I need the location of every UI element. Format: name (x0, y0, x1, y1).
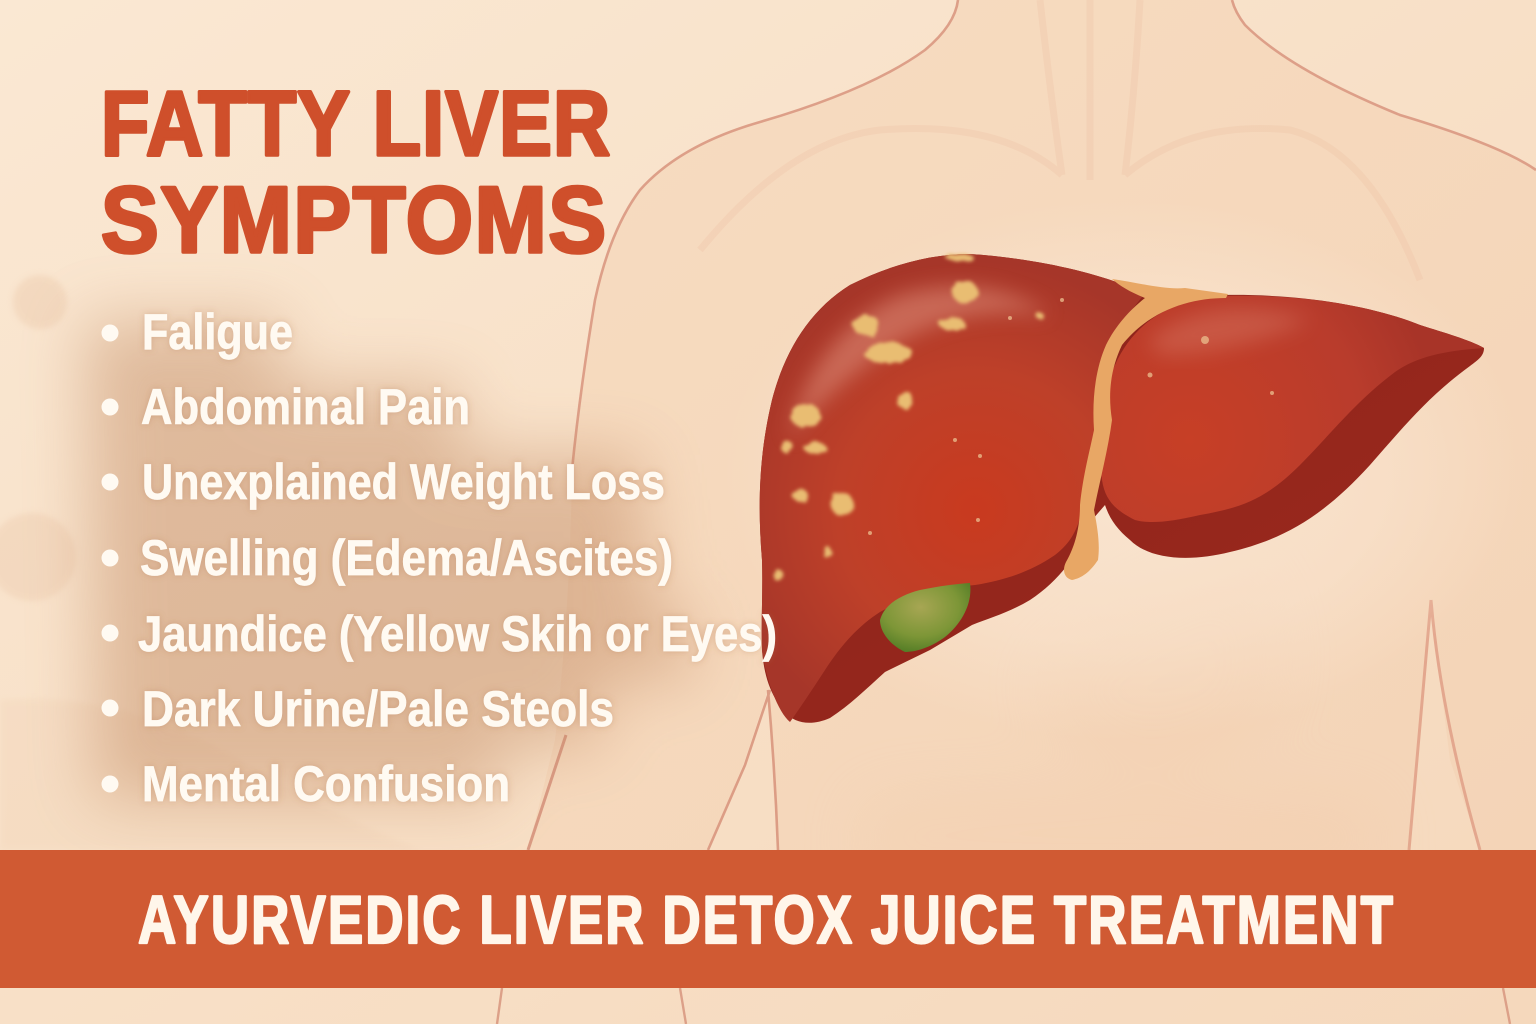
liver: dark underside (760, 254, 1484, 723)
symptoms list (102, 304, 777, 812)
liver: left lobe surface (760, 254, 1142, 722)
title: FATTY LIVER (101, 72, 610, 175)
liver: ligament (1064, 279, 1228, 580)
faint anatomy: organ shapes (860, 560, 1380, 880)
liver illustration (760, 254, 1484, 723)
symptom items (138, 304, 777, 812)
fat deposits (773, 254, 1044, 581)
liver: right lobe surface (1099, 296, 1484, 522)
bullets (102, 324, 118, 792)
title: SYMPTOMS (101, 168, 606, 273)
gallbladder (880, 583, 970, 652)
symptom items: Unexplained Weight Loss (142, 454, 665, 510)
small specks (868, 298, 1274, 535)
symptom items: Mental Confusion (142, 756, 510, 812)
liver: right lobe highlight (1150, 308, 1310, 355)
symptom items: Jaundice (Yellow Skih or Eyes) (138, 606, 777, 662)
bottom banner (0, 850, 1536, 988)
symptom items: Abdominal Pain (141, 379, 470, 435)
symptom items: Faligue (142, 304, 293, 360)
symptom items: Dark Urine/Pale Steols (142, 681, 614, 737)
text halo behind symptoms (85, 320, 690, 800)
bottom banner: AYURVEDIC LIVER DETOX JUICE TREATMENT (138, 882, 1393, 957)
human body silhouette (497, 0, 1536, 1024)
liver: highlight (790, 287, 1050, 440)
symptom items: Swelling (Edema/Ascites) (140, 530, 673, 586)
title (101, 72, 610, 273)
faint anatomy: airway and vessels (700, 0, 1420, 280)
